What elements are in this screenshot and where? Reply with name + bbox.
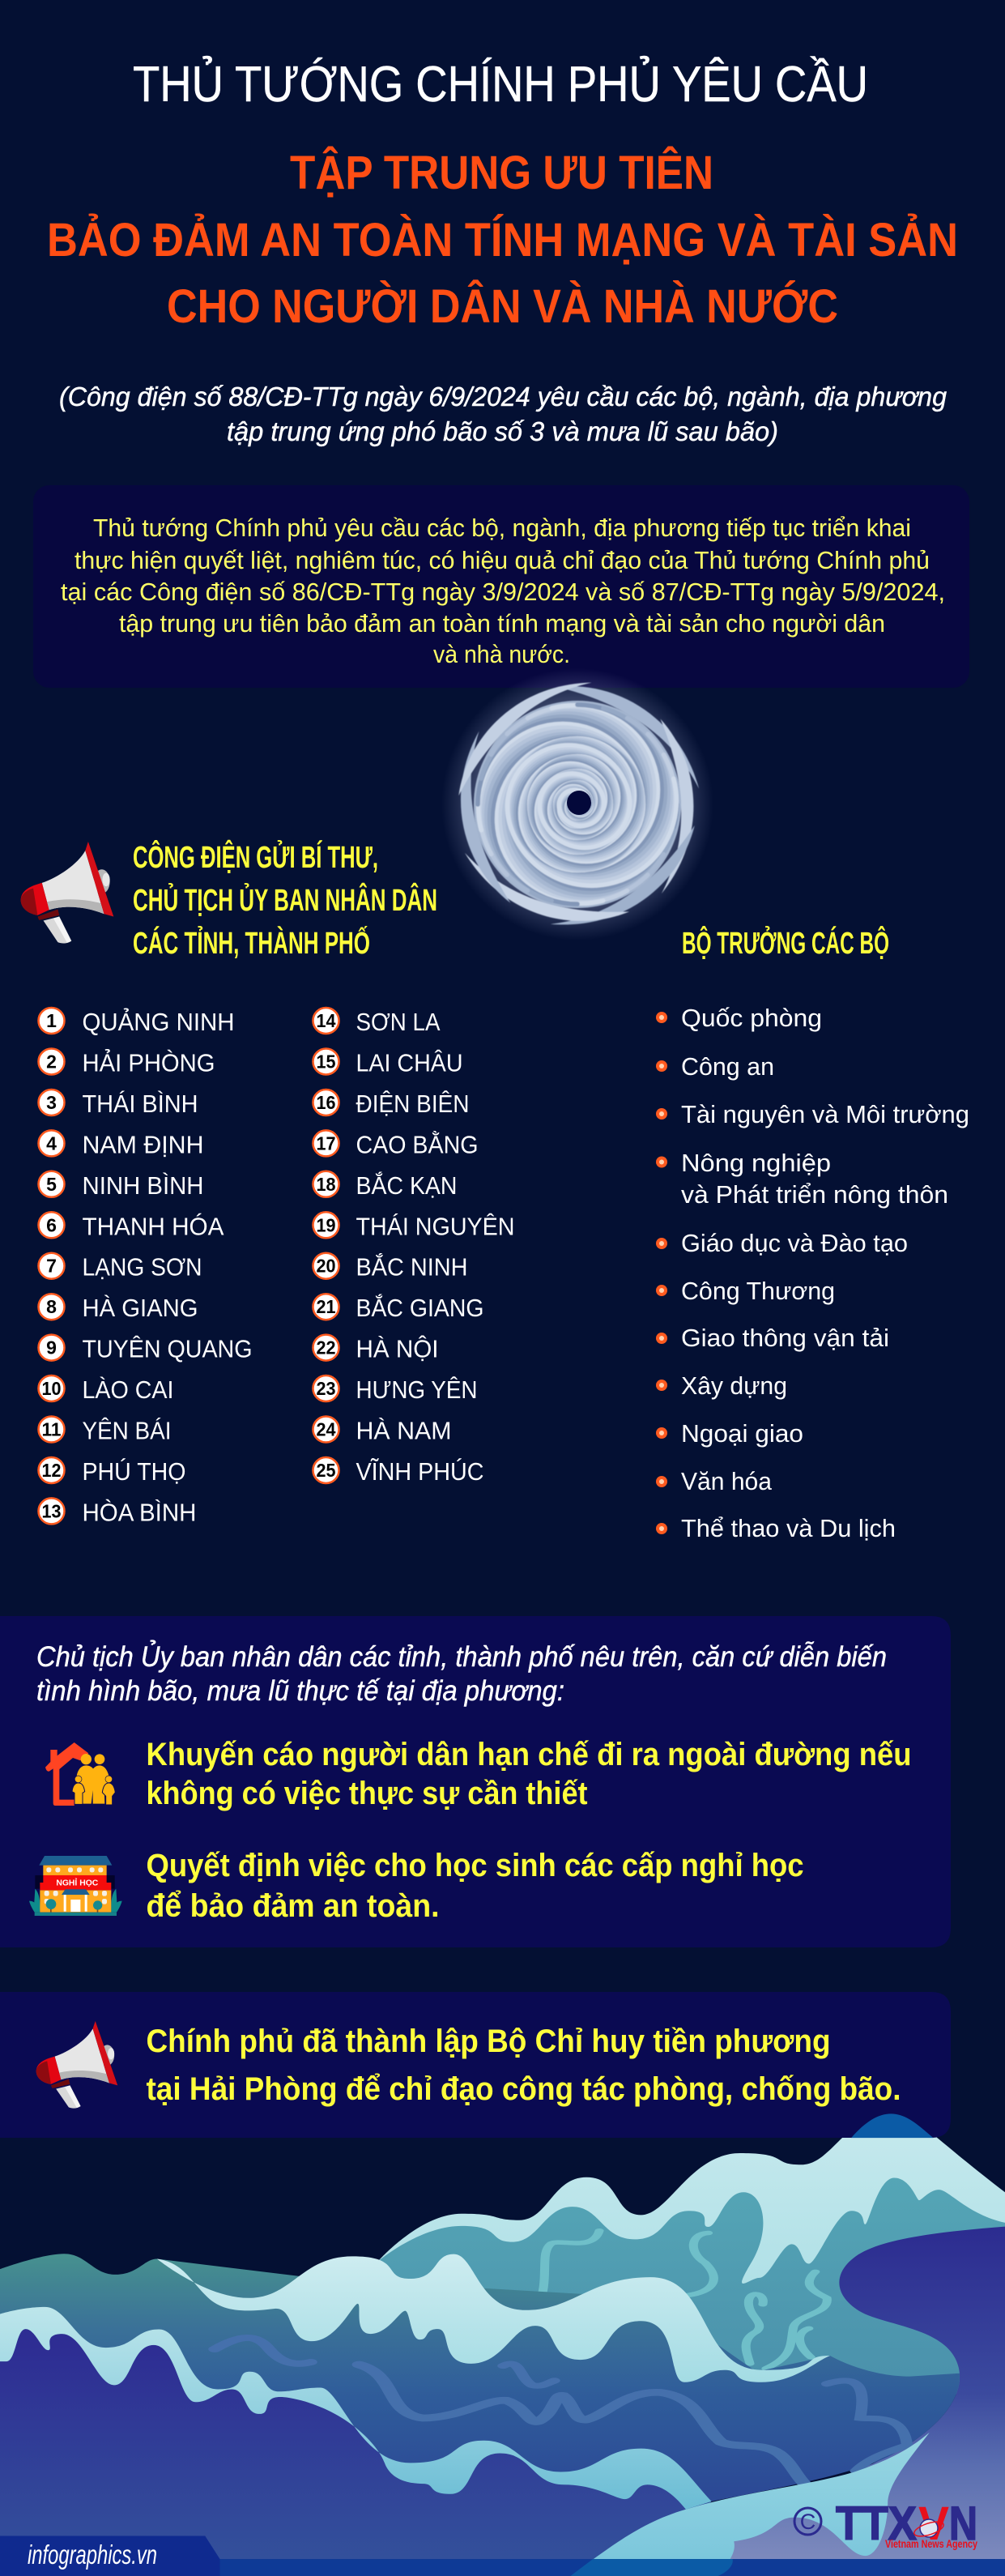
list: provinces column 1: 5 bbox=[46, 1174, 57, 1195]
list: provinces column 2: 22 bbox=[316, 1337, 335, 1358]
list: provinces column 2: 18 bbox=[316, 1174, 336, 1195]
list: provinces column 2: HƯNG YÊN bbox=[356, 1375, 478, 1404]
panel intro text bbox=[36, 1640, 887, 1707]
action text: stay home bbox=[146, 1737, 912, 1811]
panel intro text: Chủ tịch Ủy ban nhân dân các tỉnh, thành phố nêu trên, căn cứ diễn biến bbox=[36, 1640, 887, 1673]
intro text: và nhà nước. bbox=[433, 640, 570, 668]
list: provinces column 2: BẮC GIANG bbox=[356, 1293, 484, 1322]
list: provinces column 1: LẠNG SƠN bbox=[83, 1253, 202, 1282]
action text: school closure: để bảo đảm an toàn. bbox=[146, 1888, 439, 1924]
list: provinces column 1: TUYÊN QUANG bbox=[83, 1335, 253, 1363]
list: ministries bbox=[656, 1004, 969, 1542]
source: infographics.vn: infographics.vn bbox=[28, 2540, 157, 2570]
list: provinces column 1: HẢI PHÒNG bbox=[83, 1048, 215, 1077]
list: ministries: Xây dựng bbox=[681, 1371, 787, 1400]
list: provinces column 1: 6 bbox=[46, 1214, 57, 1235]
icon: megaphone bbox=[21, 842, 113, 944]
list: ministries: Nông nghiệp bbox=[681, 1149, 831, 1177]
panel: provincial chairmen bbox=[0, 1616, 951, 1947]
heading: provinces: CÁC TỈNH, THÀNH PHỐ bbox=[133, 924, 370, 961]
list: provinces column 1: 11 bbox=[42, 1419, 62, 1440]
icon: megaphone bbox=[36, 2021, 117, 2109]
title: THỦ TƯỚNG CHÍNH PHỦ YÊU CẦU bbox=[133, 57, 868, 113]
list: provinces column 2: LAI CHÂU bbox=[356, 1048, 463, 1077]
subtitle: (Công điện số 88/CĐ-TTg ngày 6/9/2024 yêu cầu các bộ, ngành, địa phương bbox=[59, 382, 948, 412]
panel intro text: tình hình bão, mưa lũ thực tế tại địa phương: bbox=[36, 1675, 564, 1707]
list: provinces column 2: 24 bbox=[316, 1419, 336, 1440]
list: ministries: Công Thương bbox=[681, 1277, 835, 1305]
action text: command: Chính phủ đã thành lập Bộ Chỉ huy tiền phương bbox=[146, 2024, 831, 2059]
list: provinces column 1: HÀ GIANG bbox=[83, 1294, 198, 1322]
subtitle: tập trung ứng phó bão số 3 và mưa lũ sau bão) bbox=[227, 416, 778, 446]
list: ministries: và Phát triển nông thôn bbox=[681, 1180, 948, 1209]
action text: school closure bbox=[146, 1848, 803, 1924]
heading: provinces: CÔNG ĐIỆN GỬI BÍ THƯ, bbox=[133, 838, 378, 875]
action text: command bbox=[146, 2024, 901, 2107]
list: provinces column 1: 13 bbox=[42, 1500, 62, 1521]
list: provinces column 2: BẮC KẠN bbox=[356, 1171, 457, 1200]
logo: TTXVN: N bbox=[949, 2497, 977, 2550]
list: provinces column 1: 8 bbox=[46, 1296, 57, 1317]
subtitle bbox=[59, 382, 948, 446]
action text: command: tại Hải Phòng để chỉ đạo công tác phòng, chống bão. bbox=[146, 2071, 901, 2107]
list: provinces column 1: 7 bbox=[46, 1256, 57, 1277]
list: ministries: Quốc phòng bbox=[681, 1004, 822, 1032]
heading in red bbox=[47, 147, 958, 333]
list: provinces column 1 bbox=[39, 1008, 253, 1526]
list: ministries: Văn hóa bbox=[681, 1467, 773, 1495]
intro text: tập trung ưu tiên bảo đảm an toàn tính mạng và tài sản cho người dân bbox=[119, 609, 885, 638]
list: provinces column 1: 10 bbox=[42, 1378, 62, 1399]
list: provinces column 2: 15 bbox=[316, 1051, 336, 1073]
heading in red: CHO NGƯỜI DÂN VÀ NHÀ NƯỚC bbox=[167, 280, 838, 333]
list: provinces column 2: 17 bbox=[316, 1132, 335, 1154]
panel: forward command bbox=[0, 1992, 951, 2138]
list: provinces column 1: 4 bbox=[46, 1132, 57, 1154]
list: provinces column 1: THÁI BÌNH bbox=[83, 1090, 198, 1118]
icon: hurricane bbox=[412, 650, 736, 964]
list: provinces column 2: HÀ NỘI bbox=[356, 1335, 439, 1363]
list: provinces column 2: CAO BẰNG bbox=[356, 1130, 478, 1158]
intro text bbox=[61, 514, 945, 668]
action text: school closure: Quyết định việc cho học sinh các cấp nghỉ học bbox=[146, 1848, 803, 1883]
wave crest tip bbox=[851, 2113, 933, 2138]
panel: intro bbox=[33, 485, 969, 688]
list: provinces column 1: YÊN BÁI bbox=[83, 1416, 172, 1445]
logo: TTXVN: V bbox=[918, 2497, 949, 2550]
list: provinces column 2: 20 bbox=[316, 1256, 335, 1277]
wave illustration bbox=[0, 2113, 1005, 2576]
list: provinces column 2: 14 bbox=[316, 1010, 336, 1031]
list: provinces column 1: NINH BÌNH bbox=[83, 1171, 204, 1200]
list: provinces column 2: 21 bbox=[316, 1296, 336, 1317]
logo: TTXVN: TTX bbox=[836, 2497, 917, 2550]
action text: stay home: không có việc thực sự cần thiết bbox=[146, 1776, 588, 1811]
list: provinces column 2 bbox=[313, 1008, 515, 1486]
list: provinces column 2: HÀ NAM bbox=[356, 1416, 452, 1445]
list: provinces column 1: 2 bbox=[46, 1051, 57, 1073]
list: provinces column 1: 9 bbox=[46, 1337, 57, 1358]
heading in red: TẬP TRUNG ƯU TIÊN bbox=[290, 147, 713, 199]
list: ministries: Công an bbox=[681, 1052, 774, 1081]
intro text: thực hiện quyết liệt, nghiêm túc, có hiệu quả chỉ đạo của Thủ tướng Chính phủ bbox=[75, 546, 930, 574]
logo: TTXVN: C bbox=[800, 2510, 815, 2534]
list: ministries: Giáo dục và Đào tạo bbox=[681, 1229, 908, 1257]
list: provinces column 2: THÁI NGUYÊN bbox=[356, 1212, 515, 1240]
list: ministries: Ngoại giao bbox=[681, 1419, 803, 1448]
list: provinces column 1: 12 bbox=[42, 1460, 62, 1481]
list: ministries: Tài nguyên và Môi trường bbox=[681, 1100, 969, 1128]
intro text: tại các Công điện số 86/CĐ-TTg ngày 3/9/2024 và số 87/CĐ-TTg ngày 5/9/2024, bbox=[61, 578, 945, 606]
list: ministries: Thể thao và Du lịch bbox=[681, 1514, 896, 1542]
list: provinces column 1: LÀO CAI bbox=[83, 1375, 173, 1404]
logo: TTXVN bbox=[794, 2497, 977, 2550]
list: provinces column 2: 16 bbox=[316, 1092, 335, 1113]
list: provinces column 2: 19 bbox=[316, 1214, 335, 1235]
list: ministries: Giao thông vận tải bbox=[681, 1324, 889, 1352]
list: provinces column 1: THANH HÓA bbox=[83, 1212, 224, 1240]
list: provinces column 2: BẮC NINH bbox=[356, 1252, 468, 1282]
list: provinces column 1: 3 bbox=[46, 1092, 57, 1113]
list: provinces column 2: SƠN LA bbox=[356, 1008, 441, 1036]
logo: TTXVN: Vietnam News Agency bbox=[885, 2537, 977, 2550]
list: provinces column 1: PHÚ THỌ bbox=[83, 1457, 186, 1486]
icon: school closed: NGHỈ HỌC bbox=[56, 1878, 99, 1888]
heading: ministers: BỘ TRƯỞNG CÁC BỘ bbox=[682, 924, 889, 961]
list: provinces column 1: QUẢNG NINH bbox=[83, 1008, 235, 1036]
icon: family and house bbox=[45, 1742, 115, 1806]
list: provinces column 2: VĨNH PHÚC bbox=[356, 1457, 484, 1486]
list: provinces column 1: NAM ĐỊNH bbox=[83, 1130, 204, 1158]
list: provinces column 2: ĐIỆN BIÊN bbox=[356, 1090, 470, 1118]
heading: provinces: CHỦ TỊCH ỦY BAN NHÂN DÂN bbox=[133, 882, 437, 918]
action text: stay home: Khuyến cáo người dân hạn chế đi ra ngoài đường nếu bbox=[146, 1737, 912, 1772]
list: provinces column 2: 23 bbox=[316, 1378, 335, 1399]
list: provinces column 1: HÒA BÌNH bbox=[83, 1498, 196, 1526]
icon: school closed bbox=[29, 1856, 122, 1916]
intro text: Thủ tướng Chính phủ yêu cầu các bộ, ngành, địa phương tiếp tục triển khai bbox=[93, 514, 911, 542]
heading: provinces bbox=[133, 838, 437, 961]
list: provinces column 1: 1 bbox=[46, 1010, 57, 1031]
list: provinces column 2: 25 bbox=[316, 1460, 336, 1481]
